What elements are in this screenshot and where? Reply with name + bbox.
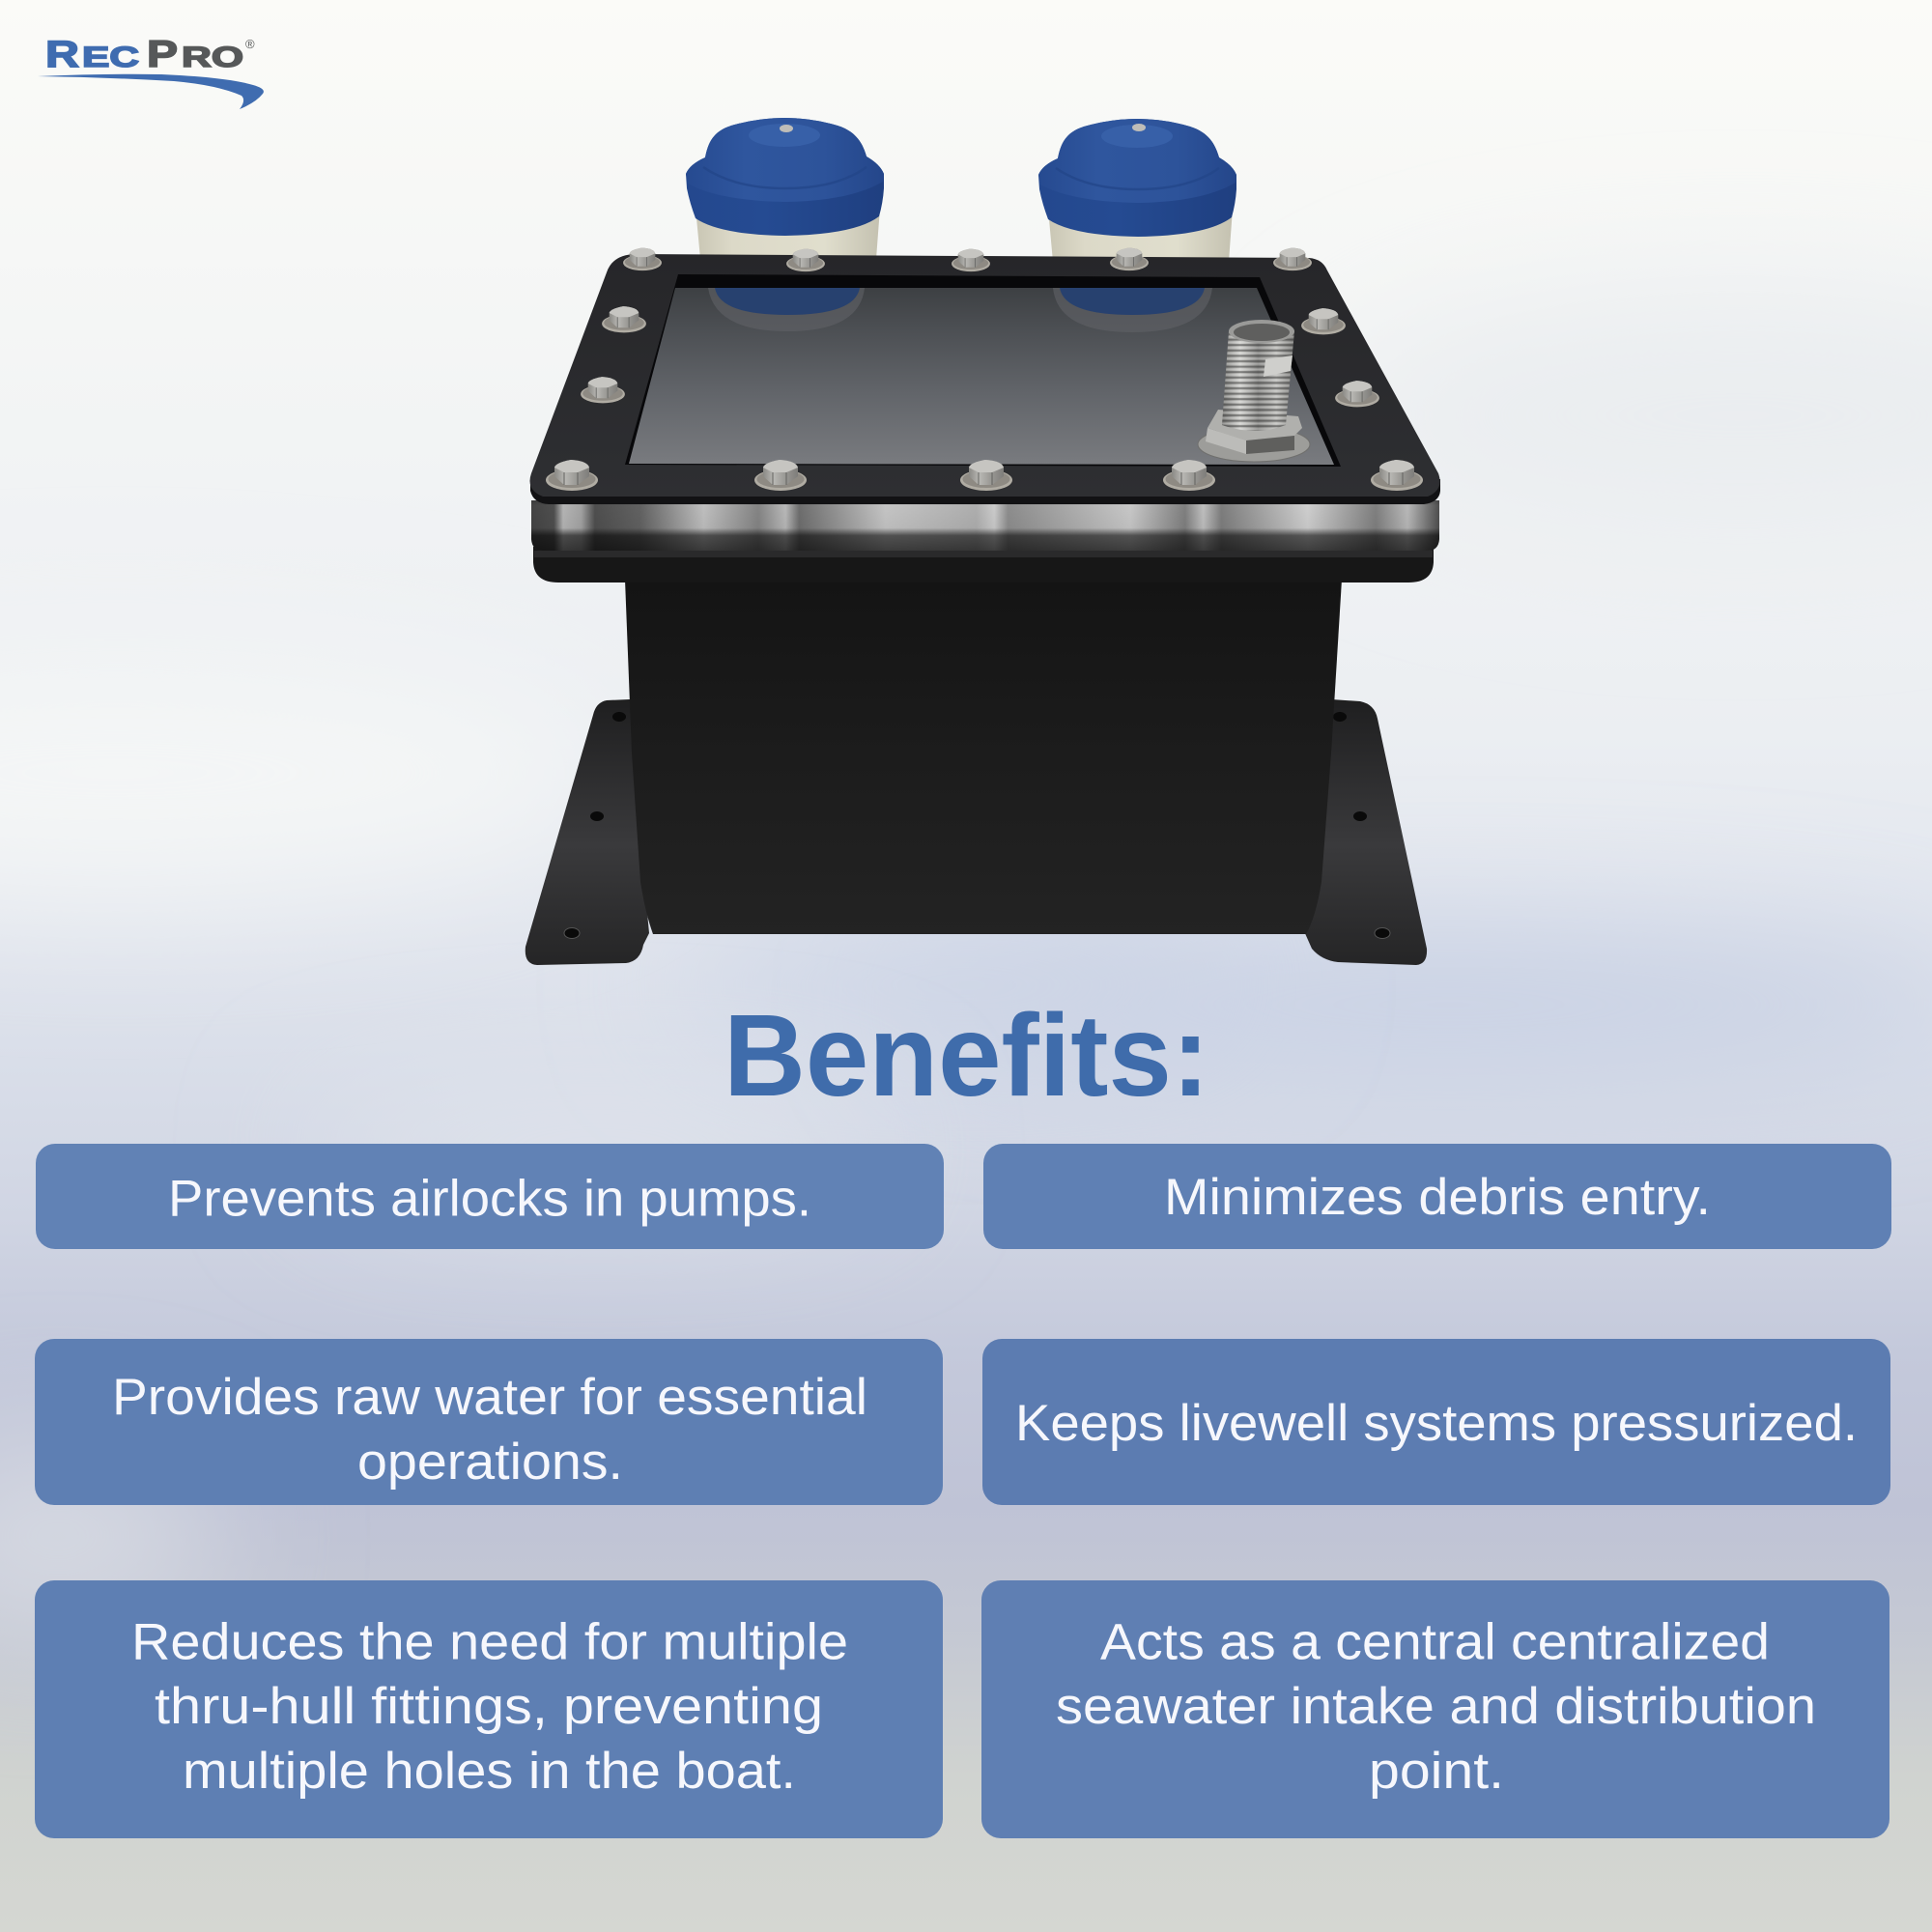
top plate (529, 254, 1440, 504)
logo text: Rec (45, 34, 139, 75)
panel: raw water: Provides raw water for essential (112, 1369, 867, 1426)
threaded fitting (1198, 320, 1310, 462)
panel: livewell pressurized: Keeps livewell systems pressurized. (1015, 1395, 1858, 1452)
right intake cap (1038, 119, 1236, 262)
panel: livewell pressurized (982, 1339, 1890, 1505)
logo text: Pro (147, 34, 255, 75)
window recess (625, 274, 1341, 467)
panel: central intake: point. (1369, 1743, 1504, 1800)
left intake cap (686, 118, 884, 259)
logo text: Rec: EC (82, 42, 139, 73)
panel: fewer thru-hull fittings: Reduces the need for multiple (131, 1613, 848, 1671)
right mounting foot (1304, 699, 1427, 965)
cap reflections (708, 288, 1212, 332)
panel: central intake: Acts as a central centralized (1100, 1613, 1770, 1671)
panel: raw water: operations. (357, 1434, 623, 1491)
logo text: Rec: R (45, 34, 79, 75)
lower flange (533, 547, 1434, 582)
product photo: sea chest (526, 118, 1440, 965)
clear acrylic band (531, 500, 1439, 557)
panel: central intake: seawater intake and distribution (1056, 1678, 1816, 1735)
panel: raw water (35, 1339, 943, 1505)
title: Benefits: Benefits: (724, 989, 1209, 1121)
left mounting foot (526, 699, 649, 965)
panel: prevents airlocks (36, 1144, 944, 1249)
panel: central intake (981, 1580, 1889, 1838)
logo text: Pro: P (147, 34, 178, 75)
panel: fewer thru-hull fittings (35, 1580, 943, 1838)
panel: minimizes debris (983, 1144, 1891, 1249)
hex bolts (546, 247, 1423, 491)
logo text: Pro: RO (182, 42, 243, 73)
logo: RecPro (38, 34, 264, 109)
panel: minimizes debris: Minimizes debris entry. (1164, 1169, 1711, 1226)
glass panel (629, 288, 1334, 465)
logo text: Pro: ® (245, 37, 255, 51)
panel: fewer thru-hull fittings: thru-hull fittings, preventing (155, 1678, 823, 1735)
panel: prevents airlocks: Prevents airlocks in pumps. (168, 1171, 811, 1227)
panel: fewer thru-hull fittings: multiple holes in the boat. (183, 1743, 796, 1800)
logo swoosh (38, 74, 264, 109)
box body (625, 580, 1342, 934)
